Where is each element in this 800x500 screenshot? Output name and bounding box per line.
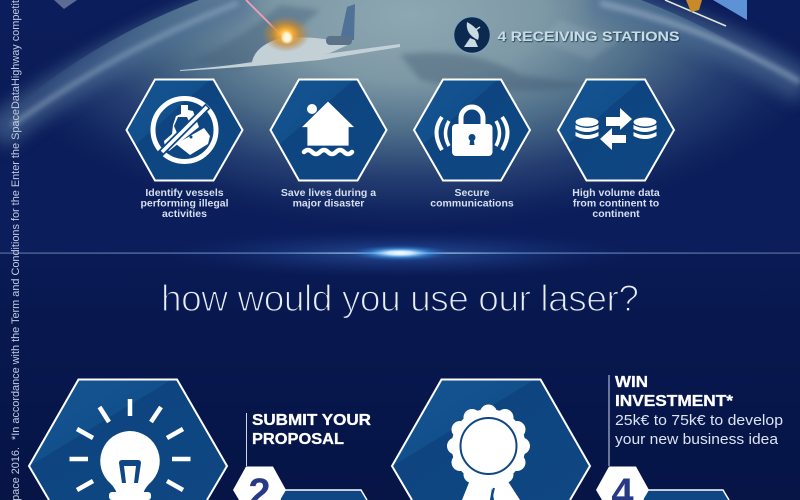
icon: flooded house [301,101,355,154]
hexagon [270,80,386,180]
hexagon [126,80,242,180]
blue panel [280,490,367,500]
connector line [246,413,248,466]
hexagon [392,380,590,500]
earth globe with atmosphere [0,0,800,217]
label: major disaster [293,198,364,210]
icon: light bulb [70,399,190,500]
label: continent [592,208,640,220]
heading: WIN [615,374,648,391]
icon: data exchange [576,108,656,150]
hexagon [414,80,530,180]
hexagon [558,80,674,180]
divider with light flare [0,230,800,278]
laser beam [246,0,282,36]
heading: INVESTMENT* [615,393,734,410]
step 2: submit your proposal [233,412,371,500]
hexagon [29,380,227,500]
heading: PROPOSAL [252,431,344,448]
icon: satellite dish [454,16,490,54]
icon: padlock with waves [436,107,508,156]
label: from continent to [573,198,659,210]
benefit: secure communications [414,80,530,210]
label: activities [162,208,207,220]
receiving stations label [454,16,680,54]
blue panel [643,490,729,500]
step 3: award [392,380,590,500]
title: how would you use our laser? [161,278,639,319]
step 1: idea [29,380,227,500]
icon: rosette [447,404,530,500]
number badge [596,466,649,500]
label: Secure [454,187,490,199]
label: communications [430,198,514,210]
description: your new business idea [615,431,779,448]
icon: prohibited ship [153,98,216,162]
step 4: win investment [596,374,783,500]
label: High volume data [572,187,660,199]
label: Save lives during a [281,187,376,199]
legal note, vertical: *In accordance with the Term and Conditions for the Enter the SpaceDataHighway competiti [10,0,22,440]
heading: SUBMIT YOUR [252,412,371,429]
heading: 4 receiving stations: 4 RECEIVING STATIONS [498,28,680,44]
aircraft with laser impact [180,4,400,71]
benefit: save lives [270,80,386,210]
label: Identify vessels [145,187,224,199]
legal note, vertical: pace 2016. [10,447,22,500]
left satellite [54,0,77,9]
right satellite [665,0,747,26]
benefit: high volume data [558,80,674,220]
label: performing illegal [140,198,229,210]
benefit: identify vessels [126,80,242,220]
connector line [608,375,610,466]
description: 25k€ to 75k€ to develop [615,412,783,429]
